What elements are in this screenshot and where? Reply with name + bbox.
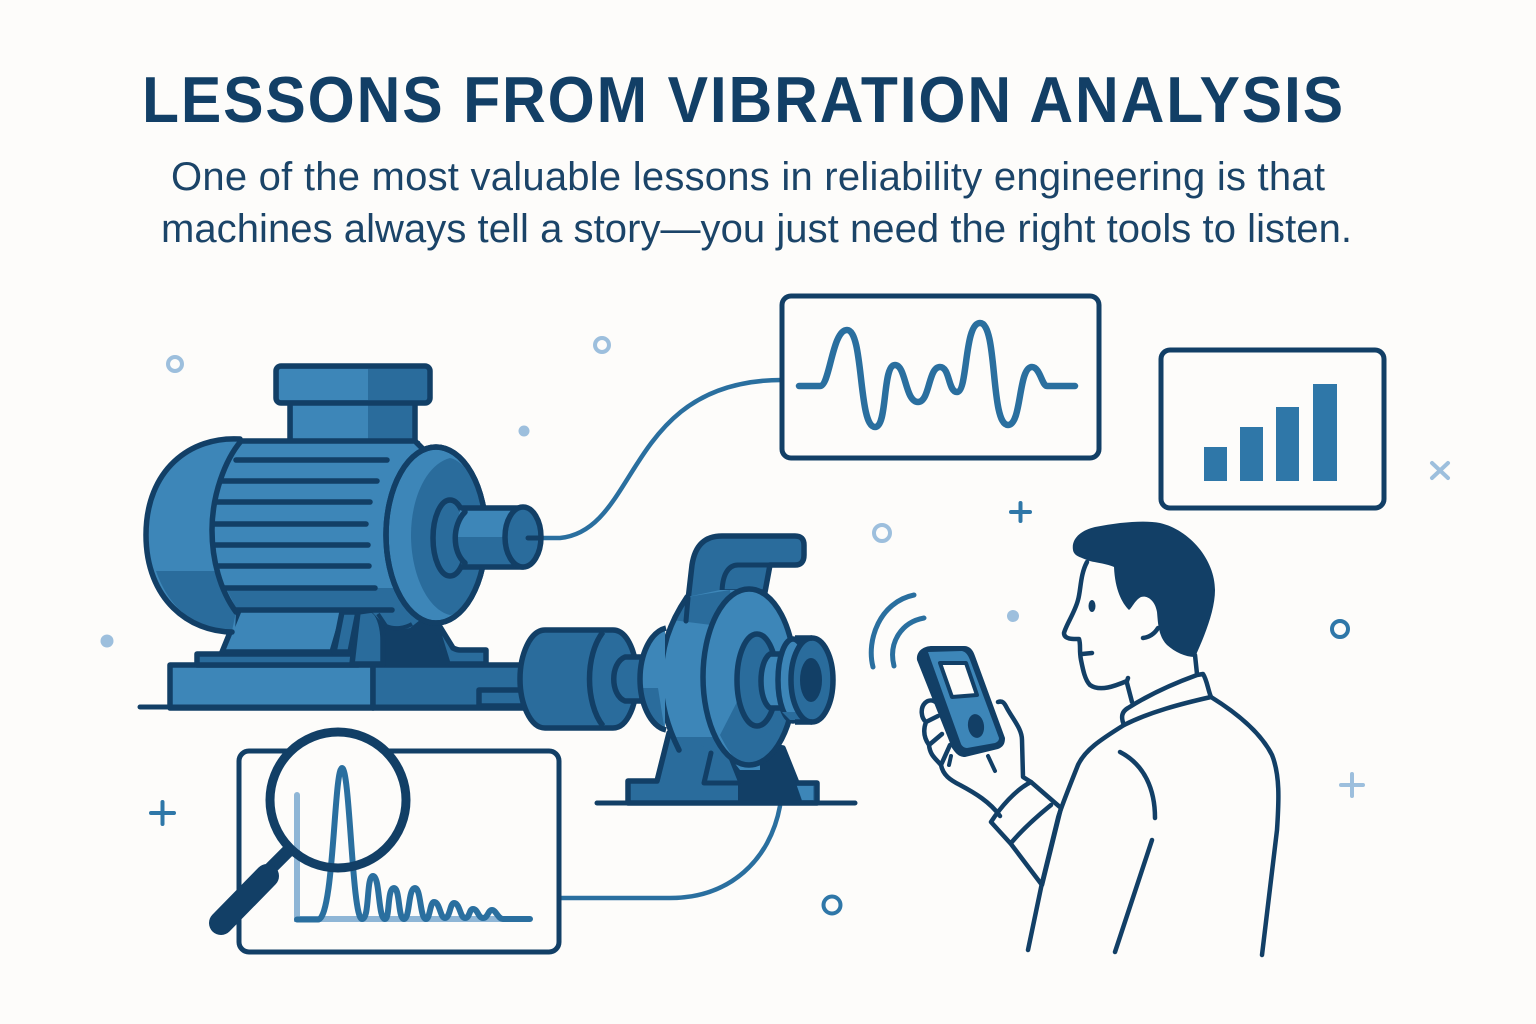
- signal waves: [871, 595, 924, 667]
- ear: [1143, 628, 1158, 638]
- subtitle: machines always tell a story—you just need the right tools to listen.: [161, 207, 1352, 251]
- motor feet and base: [140, 608, 525, 708]
- magnifier: [221, 732, 406, 923]
- face profile: [1064, 562, 1128, 688]
- cooling fins: [215, 460, 392, 610]
- sleeve and cuff: [991, 782, 1061, 885]
- hand and fingers: [922, 700, 1031, 816]
- collar: [1122, 674, 1211, 725]
- decorative rings, dots and marks: [100, 338, 1448, 914]
- motor end cover: [386, 447, 486, 623]
- coupling cylinder: [520, 630, 642, 728]
- pump casing: [640, 589, 795, 770]
- coat front: [1115, 840, 1152, 952]
- hair: [1073, 522, 1215, 657]
- eye: [1088, 600, 1096, 612]
- subtitle: [161, 155, 1352, 251]
- handheld analyzer device: [917, 646, 1005, 771]
- shoulder and back: [1211, 697, 1278, 955]
- mouth: [1082, 653, 1092, 654]
- motor rear cover: [146, 439, 241, 632]
- panel: spectrum chart with magnifier: [221, 732, 559, 952]
- wire: pump to spectrum: [558, 806, 780, 898]
- arm fold: [1120, 752, 1155, 818]
- subtitle: One of the most valuable lessons in reliability engineering is that: [171, 155, 1325, 199]
- spectrum axes: [297, 795, 500, 919]
- motor shaft: [433, 500, 541, 576]
- neck: [1127, 655, 1197, 702]
- chest: [1028, 725, 1124, 950]
- bars: [1204, 384, 1337, 481]
- electric motor: [140, 366, 541, 708]
- motor finned body: [212, 441, 440, 629]
- magnifier lens background: [270, 732, 406, 868]
- spectrum signal: [297, 768, 530, 920]
- panel: bar chart: [1161, 350, 1384, 508]
- engineer figure: [871, 522, 1278, 955]
- pump outlet: [688, 536, 804, 600]
- pump foot: [597, 733, 855, 803]
- panel: waveform chart: [782, 296, 1099, 458]
- centrifugal pump: [520, 536, 855, 803]
- pump inlet flange: [737, 634, 833, 726]
- wire: motor to waveform: [528, 380, 782, 538]
- title: LESSONS FROM VIBRATION ANALYSIS: [142, 63, 1345, 136]
- waveform line: [799, 323, 1075, 427]
- motor terminal box: [276, 366, 430, 444]
